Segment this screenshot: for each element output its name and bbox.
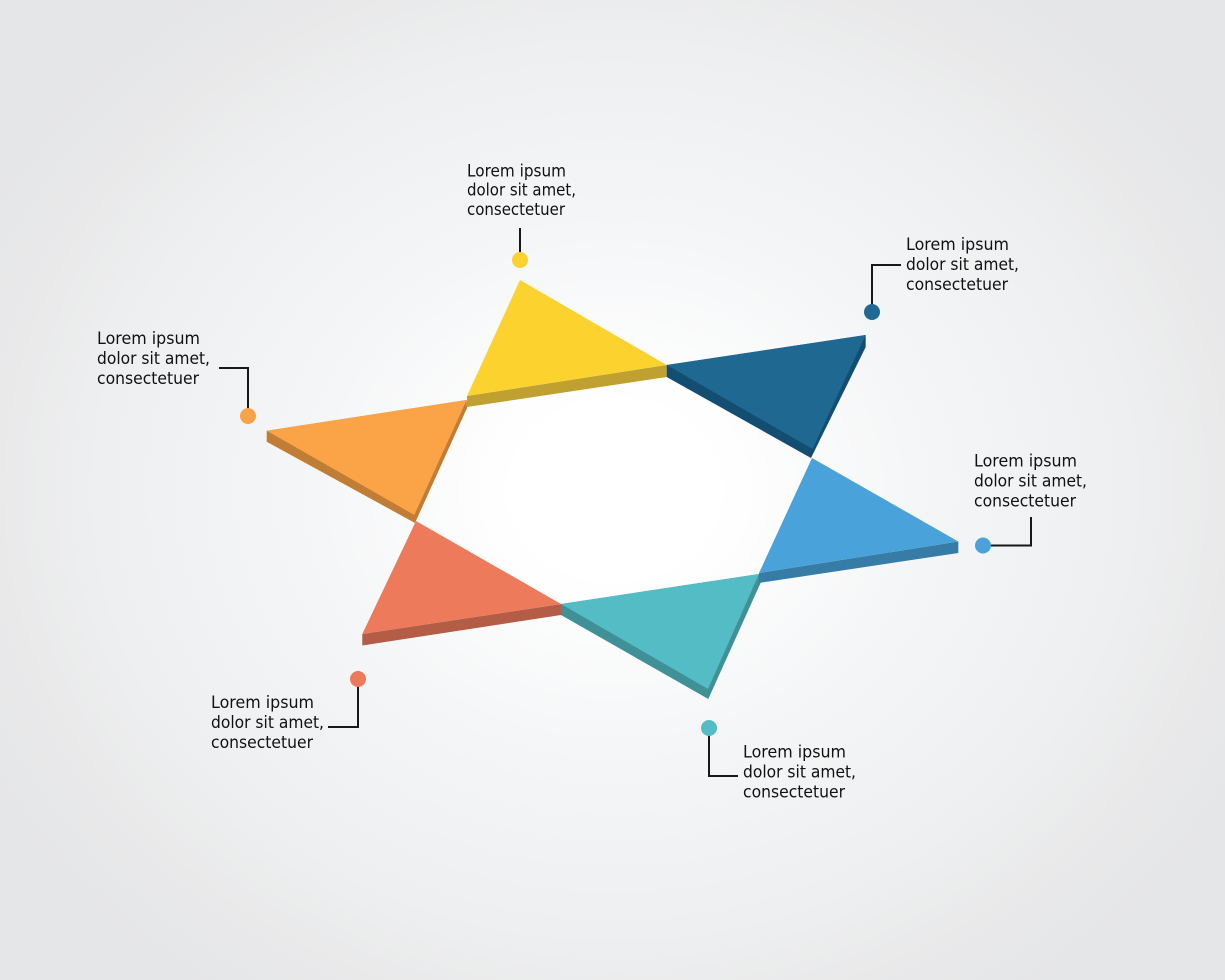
callout: teal: [701, 720, 856, 802]
callout: red: Lorem ipsum: [211, 693, 314, 713]
segment: navy triangle: [667, 335, 866, 458]
callout: light blue: [974, 452, 1087, 554]
callout: navy: dolor sit amet,: [906, 255, 1019, 275]
callout: yellow: Lorem ipsum: [467, 162, 566, 180]
callout: yellow: [467, 162, 576, 268]
callout: light blue: Lorem ipsum: [974, 452, 1077, 472]
callout: orange: [97, 329, 256, 424]
star chart: [267, 280, 958, 699]
callout: yellow: dolor sit amet,: [467, 181, 576, 200]
segment: orange triangle: [267, 400, 467, 523]
callout: navy: [864, 235, 1019, 320]
callout: light blue: consectetuer: [974, 492, 1076, 512]
segment: teal triangle: [561, 574, 761, 699]
callout: yellow: consectetuer: [467, 200, 565, 219]
callout: teal: consectetuer: [743, 782, 845, 802]
segment: yellow triangle: [467, 280, 667, 407]
segment: red triangle: [362, 521, 561, 646]
callout: orange: consectetuer: [97, 369, 199, 389]
callout: orange: Lorem ipsum: [97, 329, 200, 349]
callout: orange: dolor sit amet,: [97, 349, 210, 369]
segment: light blue triangle: [759, 458, 958, 583]
callout: red: [211, 671, 366, 753]
callout: teal: dolor sit amet,: [743, 762, 856, 782]
callout: teal: Lorem ipsum: [743, 742, 846, 762]
callout: red: dolor sit amet,: [211, 713, 324, 733]
callout: navy: consectetuer: [906, 275, 1008, 295]
callout: red: consectetuer: [211, 733, 313, 753]
callout: navy: Lorem ipsum: [906, 235, 1009, 255]
callout: light blue: dolor sit amet,: [974, 472, 1087, 492]
